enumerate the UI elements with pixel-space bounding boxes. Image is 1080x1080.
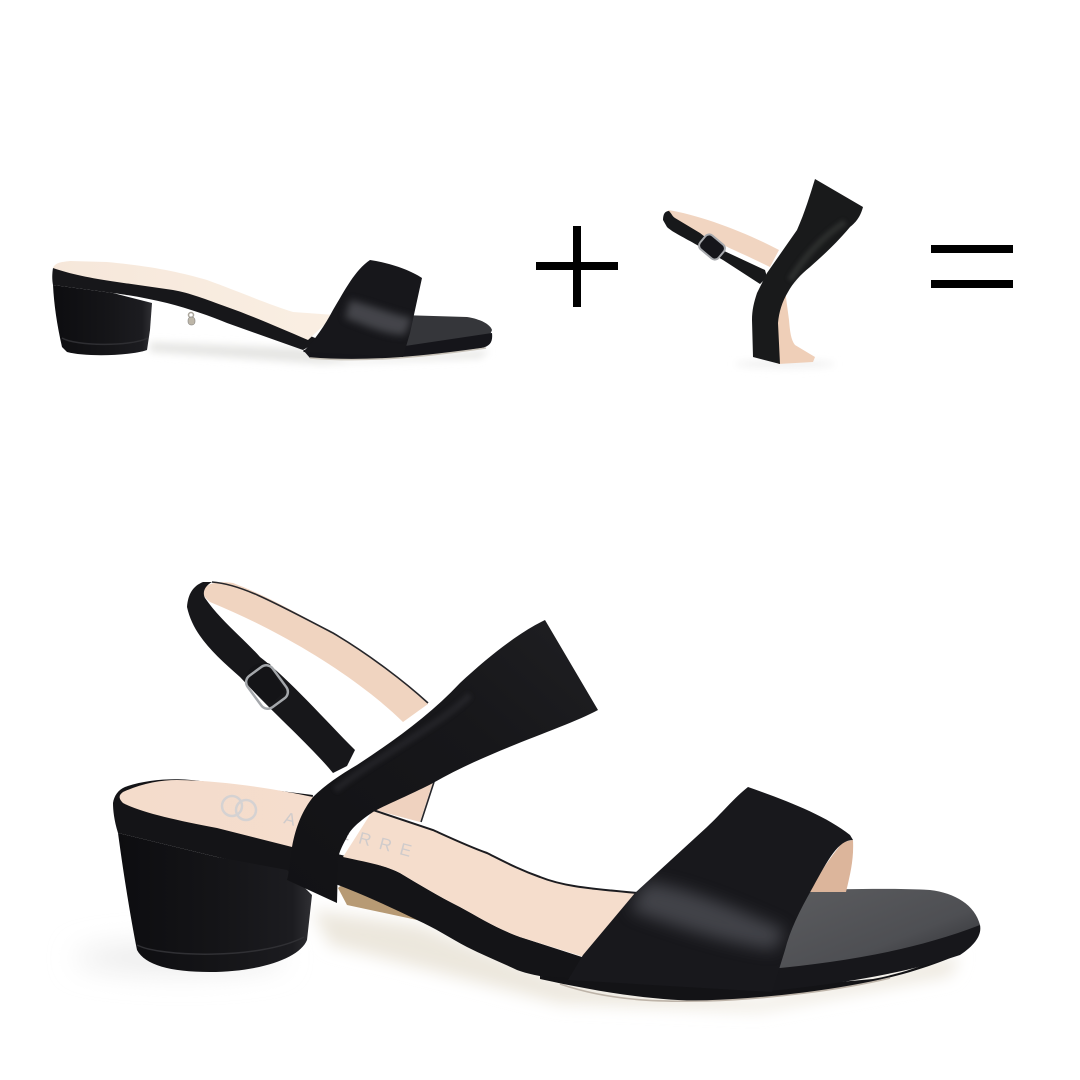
brand logo on insole	[222, 796, 256, 820]
back strap outer	[187, 582, 355, 773]
brand text on insole: ALTERRE	[282, 809, 422, 863]
product: assembled sandal	[75, 582, 980, 1010]
toe strap lining	[808, 840, 853, 892]
slide shadow	[150, 342, 490, 364]
slide outsole	[303, 333, 492, 359]
shadow under sandal	[75, 910, 960, 1010]
front footbed	[765, 889, 980, 975]
infographic: slide plus strap equals sandal	[52, 179, 1013, 1015]
front rim	[330, 852, 585, 980]
gold shank detail	[338, 882, 419, 920]
icon: plus sign	[536, 226, 618, 307]
rear insole	[120, 780, 313, 848]
heel rim	[113, 779, 313, 875]
slide heel	[53, 285, 152, 355]
slide rim	[52, 268, 320, 350]
slide key ring	[188, 312, 195, 325]
icon: equals sign	[931, 245, 1013, 288]
diagonal strap	[287, 620, 598, 903]
back strap lining	[203, 582, 428, 722]
accessory foot lining	[775, 290, 815, 364]
accessory buckle	[697, 232, 727, 262]
product: slide sandal	[52, 260, 492, 364]
slide footbed	[398, 315, 492, 350]
front insole	[343, 810, 638, 957]
outsole	[540, 934, 978, 1001]
buckle	[243, 662, 291, 712]
accessory wide strap	[752, 179, 863, 364]
wide toe strap	[568, 787, 853, 992]
front rim	[770, 925, 980, 991]
block heel	[118, 833, 312, 972]
accessory strap lining	[668, 210, 779, 267]
product: ankle strap accessory	[663, 179, 863, 368]
upper lining behind diagonal strap	[375, 782, 433, 822]
accessory back strap	[663, 211, 767, 284]
slide insole	[53, 261, 335, 340]
slide toe strap	[303, 260, 422, 357]
